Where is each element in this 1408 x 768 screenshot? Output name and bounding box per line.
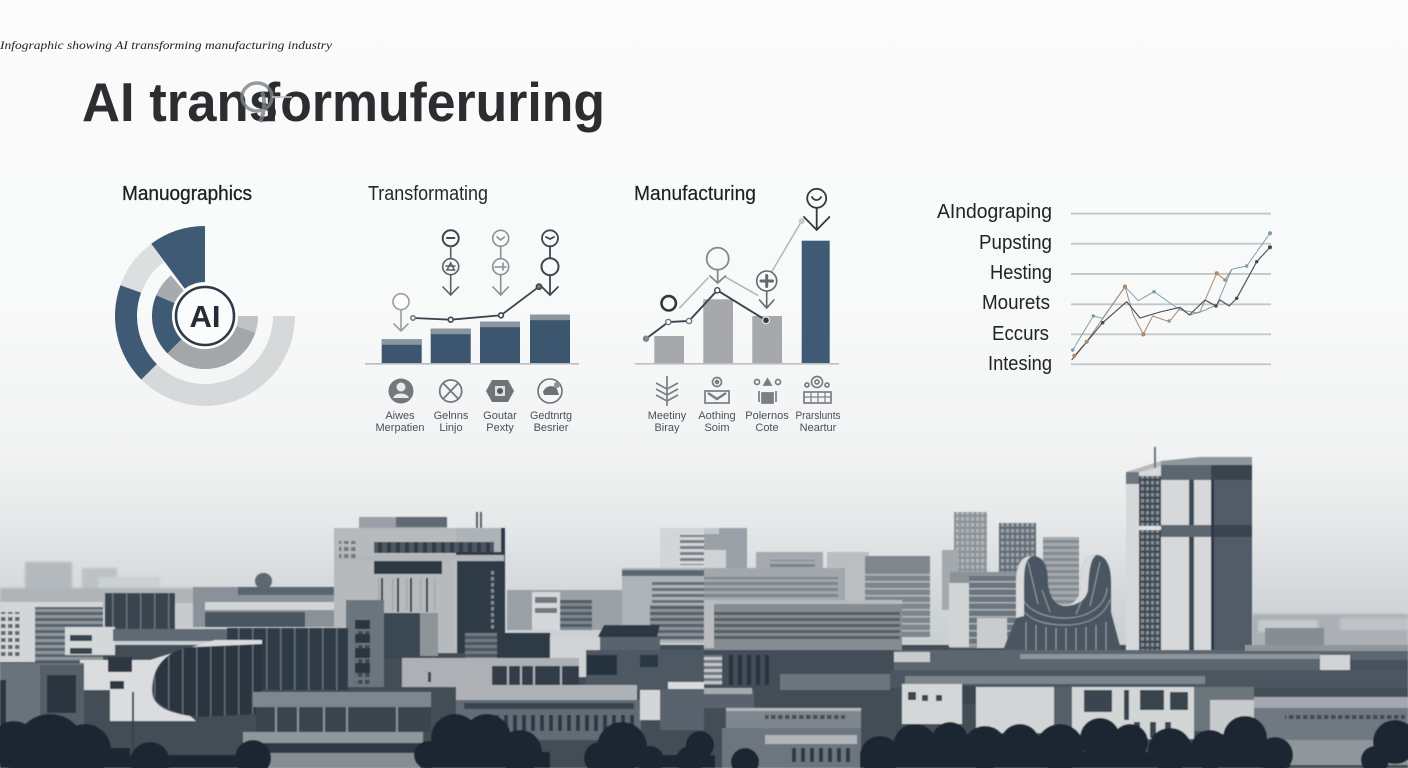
title (82, 71, 605, 133)
centre low blocks (402, 625, 704, 690)
back right-centre buildings (507, 528, 704, 643)
row labels: Eccurs (992, 323, 1049, 345)
light connector lines (679, 218, 805, 308)
row labels (937, 201, 1052, 375)
icon labels: Linjo (439, 422, 463, 434)
row labels: AIndograping (937, 201, 1052, 223)
icon labels (648, 410, 841, 434)
icon labels: Pexty (486, 422, 514, 434)
row labels: Mourets (982, 292, 1050, 314)
icon labels (376, 410, 572, 434)
gridlines (1071, 213, 1271, 365)
AI badge (172, 283, 238, 349)
icon labels: Goutar (483, 410, 517, 422)
row labels: Intesing (988, 353, 1052, 375)
icon labels: Gelnns (434, 410, 469, 422)
icon labels: Cote (755, 422, 779, 434)
trend line (411, 284, 542, 322)
tall tower (1126, 447, 1252, 668)
icons row (656, 376, 831, 406)
right low district (704, 628, 1408, 768)
city skyline photo (0, 447, 1408, 768)
donut rings (115, 226, 295, 406)
title: formuferuring (263, 71, 605, 133)
icon labels: Aothing (698, 410, 736, 422)
heading: Manufacturing: Manufacturing (634, 183, 756, 205)
pin markers (662, 189, 829, 310)
pin markers (393, 230, 558, 331)
far haze buildings (0, 562, 1408, 650)
bars (365, 315, 579, 365)
panel: transformating bar chart (365, 183, 579, 434)
panel: manufacturing bar chart (634, 183, 841, 434)
line series (1071, 231, 1272, 360)
main office tower (227, 512, 505, 690)
icon labels: Prarslunts (796, 410, 841, 422)
heading: Manuographics: Manuographics (122, 183, 252, 205)
icon labels: Besrier (534, 422, 569, 434)
panel: line chart with labels (937, 201, 1272, 375)
trend line (643, 288, 769, 342)
icon labels: Biray (654, 422, 680, 434)
icon labels: Merpatien (376, 422, 424, 434)
left district (0, 573, 341, 662)
icon labels: Meetiny (648, 410, 687, 422)
panel: donut chart (115, 183, 295, 406)
row labels: Hesting (990, 262, 1052, 284)
row labels: Pupsting (979, 232, 1052, 254)
title: AI trans (82, 71, 278, 133)
U-shaped landmark (1003, 555, 1121, 650)
left low block (0, 663, 134, 768)
heading: Transformating: Transformating (368, 183, 488, 205)
foreground trees (0, 714, 1408, 768)
icon labels: Soim (704, 422, 730, 434)
icon labels: Neartur (800, 422, 837, 434)
icon labels: Aiwes (385, 410, 415, 422)
curved white building (80, 640, 262, 721)
AI badge: AI (190, 299, 220, 334)
low foreground buildings (243, 682, 704, 768)
distant high-rises (942, 512, 1079, 648)
icon labels: Polernos (745, 410, 789, 422)
icon labels: Gedtnrtg (530, 410, 572, 422)
base mass (0, 645, 1408, 768)
icons row (388, 378, 562, 404)
right-centre mid buildings (704, 528, 930, 650)
bars (635, 241, 839, 365)
caption: Infographic showing AI transforming manufacturing industry (0, 38, 333, 52)
